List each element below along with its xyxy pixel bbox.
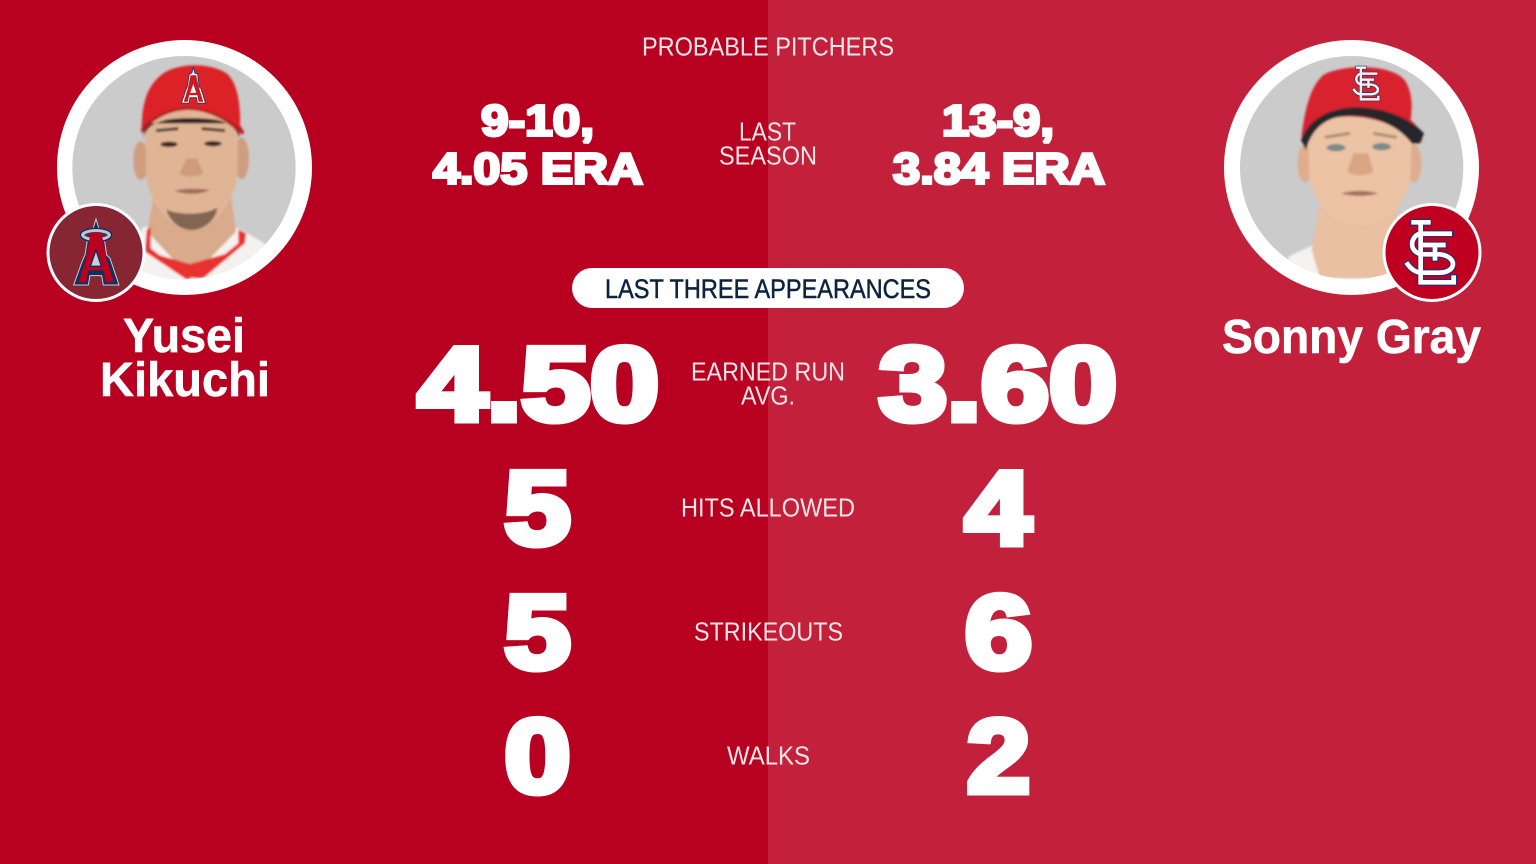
icon: interlocked StL monogram — [1408, 222, 1454, 282]
stat row: walks: 0 — [504, 699, 570, 815]
stat row: hits allowed — [504, 451, 1031, 567]
stat row: earned run average: AVG. — [741, 382, 795, 410]
stat row: walks — [504, 699, 1030, 815]
stat row: earned run average: 4.50 — [418, 327, 659, 443]
team logo: Cardinals — [1382, 203, 1482, 302]
player name: Yusei Kikuchi: Yusei — [123, 310, 245, 363]
stat row: hits allowed: 5 — [504, 451, 570, 567]
last season record: Kikuchi — [433, 96, 643, 194]
pill heading: last three appearances: LAST THREE APPEARANCES — [605, 274, 931, 304]
stat row: strikeouts: 6 — [965, 575, 1032, 691]
icon: halo and letter A — [74, 219, 119, 285]
player portrait: Yusei Kikuchi — [57, 40, 312, 295]
stat row: hits allowed: HITS ALLOWED — [681, 494, 855, 522]
icon: cap monogram — [1354, 68, 1378, 99]
player portrait: Sonny Gray — [1224, 40, 1479, 295]
last season record: Gray: 13-9, — [942, 96, 1054, 146]
stat row: walks: WALKS — [727, 742, 810, 770]
last season record: Kikuchi: 4.05 ERA — [433, 144, 643, 194]
player name: Yusei Kikuchi — [100, 310, 270, 407]
player name: Sonny Gray: Sonny Gray — [1222, 311, 1481, 364]
pill heading: last three appearances — [572, 268, 964, 308]
stat row: earned run average — [418, 327, 1117, 443]
panel: left background Angels — [0, 0, 768, 864]
last season record: Gray: 3.84 ERA — [893, 144, 1105, 194]
stat row: strikeouts: 5 — [504, 575, 570, 691]
last season record: Gray — [893, 96, 1105, 194]
label: last season: LAST — [739, 118, 796, 146]
stat row: strikeouts: STRIKEOUTS — [694, 618, 843, 646]
stat row: earned run average: 3.60 — [879, 327, 1117, 443]
title: PROBABLE PITCHERS — [642, 34, 894, 62]
panel: right background Cardinals — [768, 0, 1536, 864]
stat row: hits allowed: 4 — [965, 451, 1031, 567]
icon: cap logo — [181, 67, 206, 103]
stat row: strikeouts — [504, 575, 1032, 691]
label: last season — [719, 118, 817, 170]
team logo: Angels — [46, 203, 146, 302]
stat row: walks: 2 — [967, 699, 1030, 815]
last season record: Kikuchi: 9-10, — [481, 96, 594, 146]
player name: Yusei Kikuchi: Kikuchi — [100, 354, 270, 407]
stat row: earned run average: EARNED RUN — [691, 358, 845, 386]
label: last season: SEASON — [719, 142, 817, 170]
